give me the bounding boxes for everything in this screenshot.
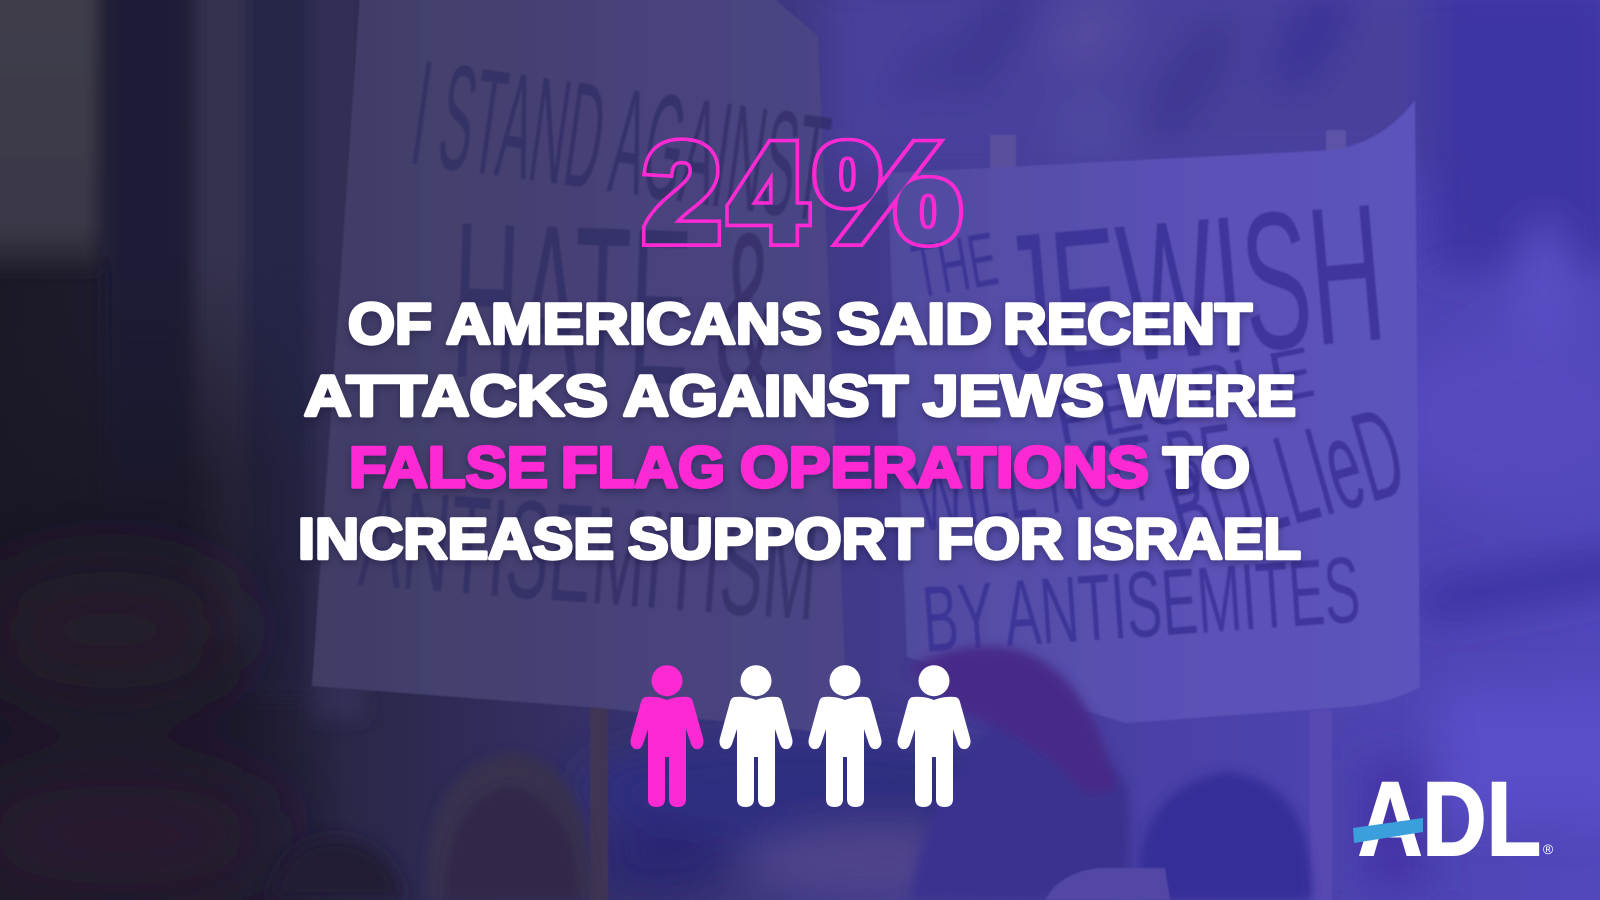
handwriting on right sign: PEOPLE: [1048, 332, 1320, 461]
statistic: 24% outlined: 24: [643, 114, 807, 271]
headline text: AMERICANS: [446, 292, 822, 356]
blue-toned blurred crowd bottom centre: [580, 735, 1020, 895]
headline text: ISRAEL: [1076, 508, 1301, 572]
sign pole behind man: [590, 700, 608, 900]
sign pole right: [1310, 710, 1332, 900]
left protest sign: [312, 0, 848, 735]
handwriting on right sign: [906, 162, 1419, 672]
headline text: OPERATIONS: [740, 436, 1149, 500]
person icon: white 2: [808, 665, 882, 807]
woman's dark curly hair: [1139, 772, 1312, 900]
registered mark: ®: [1543, 841, 1554, 857]
statistic: 24% outlined: %: [815, 115, 961, 271]
headline text: INCREASE: [298, 508, 614, 572]
right protest sign: [887, 100, 1420, 723]
handwriting on right sign: WILL NOT BE: [908, 403, 1242, 552]
ADL logo: ADL: [1358, 761, 1541, 878]
background photo: protest signs: ANTISEMITISM: [355, 458, 823, 650]
headline text: SAID: [837, 292, 992, 356]
blurred dark vertical bands at left: [0, 0, 365, 720]
headline text: ATTACKS: [304, 364, 608, 428]
headline text: OF: [348, 292, 432, 356]
logo blue strike bar: [1353, 818, 1423, 843]
highlighted phrase: FALSE: [349, 436, 548, 500]
left protest sign: HATE &: [448, 176, 782, 435]
headline text: [298, 292, 1301, 572]
headline text: WERE: [1119, 364, 1296, 428]
dark lower-left gradient: [97, 316, 309, 900]
headline text: SUPPORT: [628, 508, 923, 572]
person icon: pink: [630, 665, 704, 807]
white shirt shoulder: [1045, 868, 1170, 900]
headline text: FOR: [937, 508, 1063, 572]
statistic: 24% outlined: [642, 137, 964, 248]
pictogram: 1 in 4 people: [630, 665, 970, 807]
headline text: JEWS: [923, 364, 1104, 428]
person icon: white 1: [720, 665, 792, 807]
headline text: FLAG: [561, 436, 725, 500]
blurred reddish crowd lower left: [0, 570, 280, 885]
headline text: TO: [1163, 436, 1250, 500]
person in maroon hat: [908, 646, 1130, 900]
headline text: AGAINST: [623, 364, 908, 428]
headline text: RECENT: [1003, 292, 1252, 356]
dark head silhouette: [268, 838, 405, 900]
man's head bottom left: [427, 752, 594, 900]
handwriting on left sign: [355, 28, 838, 650]
blurred streaks top right: [830, 0, 1600, 890]
handwriting on right sign: THE: [906, 216, 1004, 315]
person icon: white 3: [898, 665, 970, 807]
